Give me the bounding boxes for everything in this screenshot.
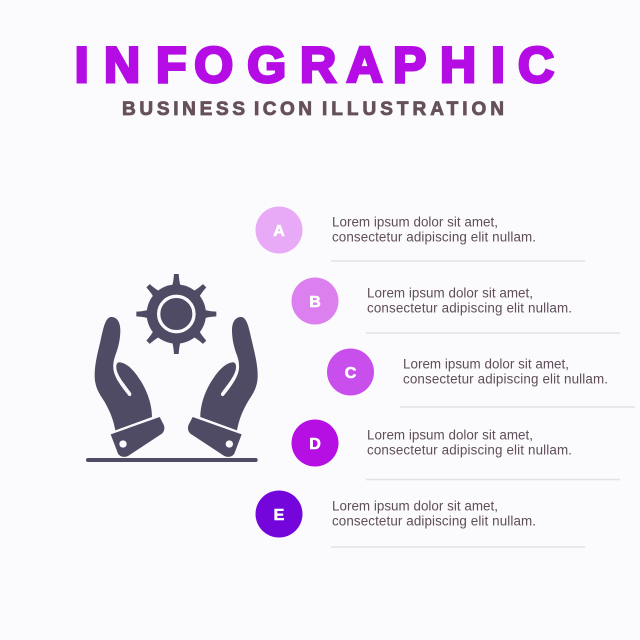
text B: Lorem ipsum dolor sit amet, [367,286,533,300]
badge D [292,420,338,466]
subtitle: ILLUSTRATION [322,99,504,120]
step A [256,206,585,261]
step E [256,490,585,547]
badge D: D [309,436,321,453]
badge C [327,348,374,396]
text C: Lorem ipsum dolor sit amet, [403,356,569,372]
subtitle: ICON [254,99,312,120]
subtitle: BUSINESS [122,99,245,120]
icon: hands holding gear [86,274,258,462]
title: INFOGRAPHIC [75,37,554,93]
text A: consectetur adipiscing elit nullam. [332,230,536,244]
badge B: B [309,294,321,311]
badge E [256,490,302,538]
text D: Lorem ipsum dolor sit amet, [367,428,533,442]
text E: Lorem ipsum dolor sit amet, [332,498,498,514]
text A: Lorem ipsum dolor sit amet, [332,214,498,230]
text B: consectetur adipiscing elit nullam. [367,300,572,316]
badge B [292,278,338,324]
text C: consectetur adipiscing elit nullam. [403,372,608,386]
icon: ground line [86,458,258,462]
icon: right hand [188,317,258,457]
badge C: C [345,365,357,382]
step B [292,278,620,333]
badge E: E [274,507,285,524]
badge A: A [273,223,285,240]
step C [327,348,635,407]
text D: consectetur adipiscing elit nullam. [367,442,572,458]
icon: left hand [95,317,164,457]
badge A [256,206,302,254]
step D [292,420,620,480]
text E: consectetur adipiscing elit nullam. [332,514,536,528]
icon: gear [136,274,216,354]
